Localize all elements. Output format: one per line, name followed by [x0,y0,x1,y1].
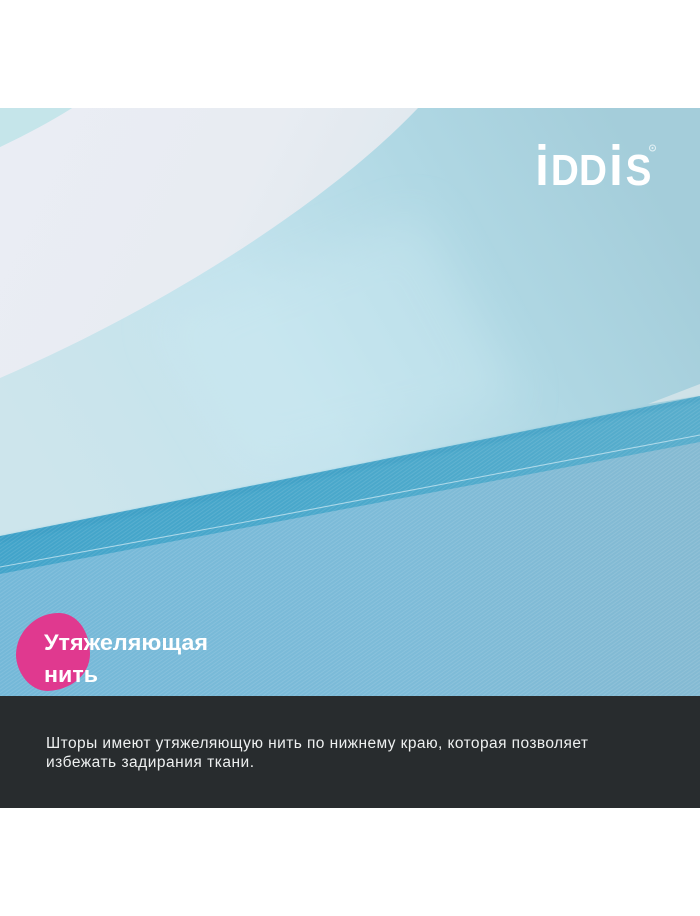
infographic canvas [0,108,700,808]
stitch line [0,435,700,567]
dark caption bar [0,696,700,808]
heading: нить [44,662,98,687]
logo: IDDIS: i [609,134,623,198]
hem shadow [0,397,700,543]
logo: IDDIS [535,134,656,198]
teal corner at top left [4,108,71,146]
registered mark [650,145,656,151]
pale corner at right edge [648,384,700,404]
photo: shower curtain fabric [0,108,700,696]
logo: IDDIS: D [579,145,607,195]
heading: Утяжеляющая [44,630,208,655]
lower fabric panel [0,438,700,696]
logo: IDDIS: S [626,145,652,195]
lighter fold panel [391,258,470,376]
caption text: избежать задирания ткани. [46,754,254,771]
white curved band [0,108,418,378]
heading [44,630,208,687]
logo: IDDIS: i [535,134,549,198]
fabric weave texture [0,396,700,696]
weighted hem strip [0,396,700,574]
pink blob accent [16,613,90,691]
logo: IDDIS: D [551,145,579,195]
pale blue curtain field [0,108,700,536]
caption text [46,735,588,771]
caption text: Шторы имеют утяжеляющую нить по нижнему краю, которая позволяет [46,735,588,752]
